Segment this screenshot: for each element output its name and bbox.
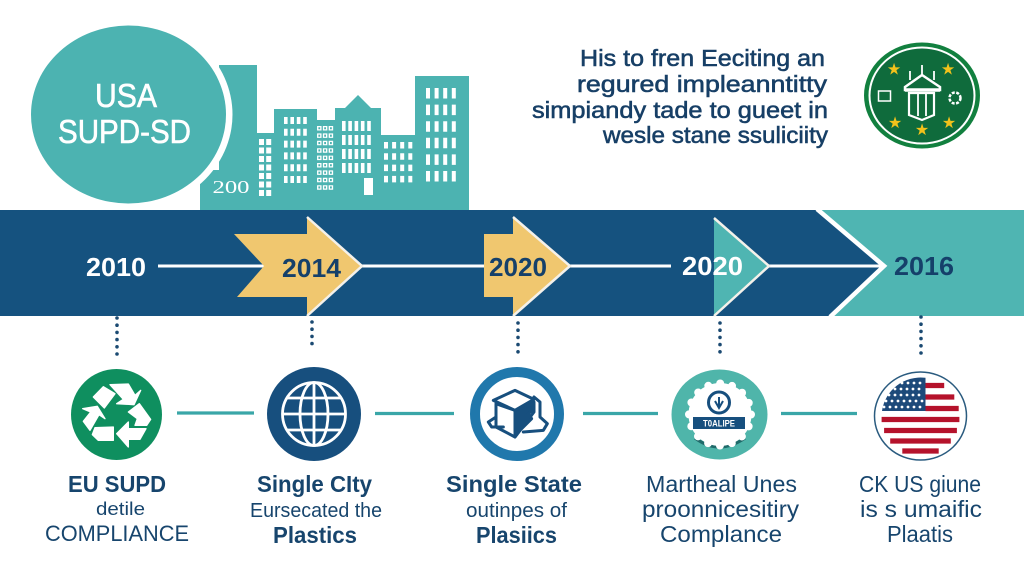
year labels: 2016 <box>894 251 954 281</box>
title circle: SUPD-SD <box>58 113 191 150</box>
arrow: 2020 teal <box>714 218 769 316</box>
dotted drop lines <box>117 317 921 356</box>
label: Single State: Plasiics <box>476 522 557 548</box>
buildings skyline: 200 <box>212 177 250 197</box>
icon: package box <box>475 372 559 456</box>
year labels: 2020 <box>489 252 547 282</box>
icon: US flag <box>874 372 966 460</box>
icon: recycling <box>71 369 162 460</box>
label: Martheal Unes: Martheal Unes <box>646 471 797 497</box>
header text block: His to fren Eeciting an <box>580 45 825 71</box>
title circle: USA <box>95 77 157 114</box>
icon: EU emblem: ★ <box>888 115 902 132</box>
icon: EU emblem: ★ <box>941 62 955 78</box>
arrow: 2014 <box>234 217 362 316</box>
header text block: wesle stane ssuliciity <box>602 122 829 148</box>
year labels: 2020 <box>682 251 743 281</box>
year labels: 2014 <box>282 253 342 283</box>
icon: EU emblem: ★ <box>915 122 929 139</box>
label: Martheal Unes <box>642 471 800 547</box>
icon connectors <box>177 411 857 415</box>
header text block <box>532 45 829 148</box>
label: CK US giune <box>859 471 982 547</box>
label: Single City <box>250 471 382 548</box>
label: Martheal Unes: proonnicesitiry <box>642 496 800 522</box>
label: Martheal Unes: Complance <box>660 521 782 547</box>
label: Single State: Single State <box>446 471 582 497</box>
icon: globe <box>267 367 361 461</box>
icon: EU emblem: ★ <box>887 62 901 78</box>
header text block: regured impleanntitty <box>577 71 828 97</box>
icon: compliance badge <box>672 370 768 460</box>
title circle <box>24 18 232 210</box>
label: Single City: Plastics <box>273 522 357 548</box>
label: Single City: Single CIty <box>257 471 372 497</box>
timeline connector lines <box>158 264 882 268</box>
year labels: 2010 <box>86 252 146 282</box>
label: EU SUPD <box>45 471 189 546</box>
year labels <box>86 251 954 283</box>
icon: EU emblem <box>864 42 980 148</box>
label: Single State: outinpes of <box>466 500 567 522</box>
label: CK US giune: CK US giune <box>859 471 981 497</box>
label: Single City: Eursecated the <box>250 500 382 522</box>
icon: compliance badge: T0ALIPE <box>703 418 735 428</box>
label: CK US giune: Plaatis <box>887 521 953 547</box>
label: EU SUPD: detile <box>96 499 145 519</box>
icon: EU emblem: ★ <box>942 115 956 132</box>
timeline band <box>0 209 1024 317</box>
label: EU SUPD: EU SUPD <box>68 471 166 497</box>
buildings skyline <box>200 65 469 210</box>
label: Single State <box>446 471 582 548</box>
header text block: simpiandy tade to gueet in <box>532 97 828 123</box>
arrow: 2020 yellow <box>484 217 570 316</box>
label: CK US giune: is s umaific <box>860 496 982 522</box>
label: EU SUPD: COMPLIANCE <box>45 521 189 546</box>
